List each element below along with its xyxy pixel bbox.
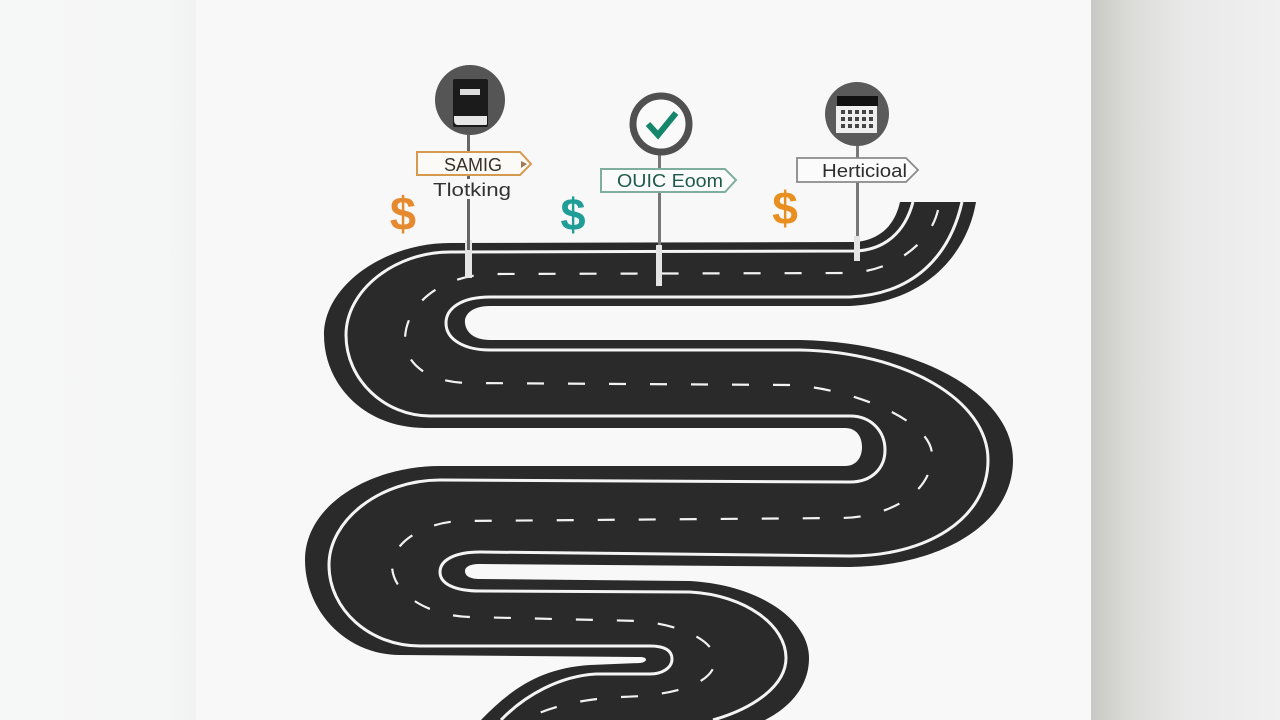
icon: teal dollar: $ xyxy=(560,189,586,240)
icon: orange dollar right: $ xyxy=(772,182,798,234)
sign post 3: calendar xyxy=(797,82,918,261)
sign: grey: Herticioal xyxy=(822,161,907,181)
road edge line: outer xyxy=(440,202,988,720)
icon: orange dollar left: $ xyxy=(390,187,416,240)
sign: orange: SAMIG xyxy=(444,155,502,175)
icon: check mark xyxy=(633,96,689,152)
sign post 2: check xyxy=(601,96,736,286)
winding road xyxy=(305,202,1013,720)
pole xyxy=(465,240,472,278)
icon: calendar xyxy=(825,82,889,146)
background wall: left xyxy=(0,0,196,720)
label: sign caption: Tlotking xyxy=(433,180,511,200)
road centre dashes xyxy=(392,210,938,720)
sign: green xyxy=(601,169,736,192)
pole xyxy=(656,245,662,286)
background wall: right xyxy=(1091,0,1280,720)
road surface xyxy=(305,202,1013,720)
sign: grey xyxy=(797,158,918,182)
road edge line: inner xyxy=(329,202,913,720)
sign: orange xyxy=(417,152,531,175)
sign: green: OUIC Eoom xyxy=(617,171,723,191)
sign post 1: study xyxy=(417,65,531,278)
pole xyxy=(854,236,860,261)
panel: white poster xyxy=(196,0,1091,720)
icon: book xyxy=(435,65,505,135)
